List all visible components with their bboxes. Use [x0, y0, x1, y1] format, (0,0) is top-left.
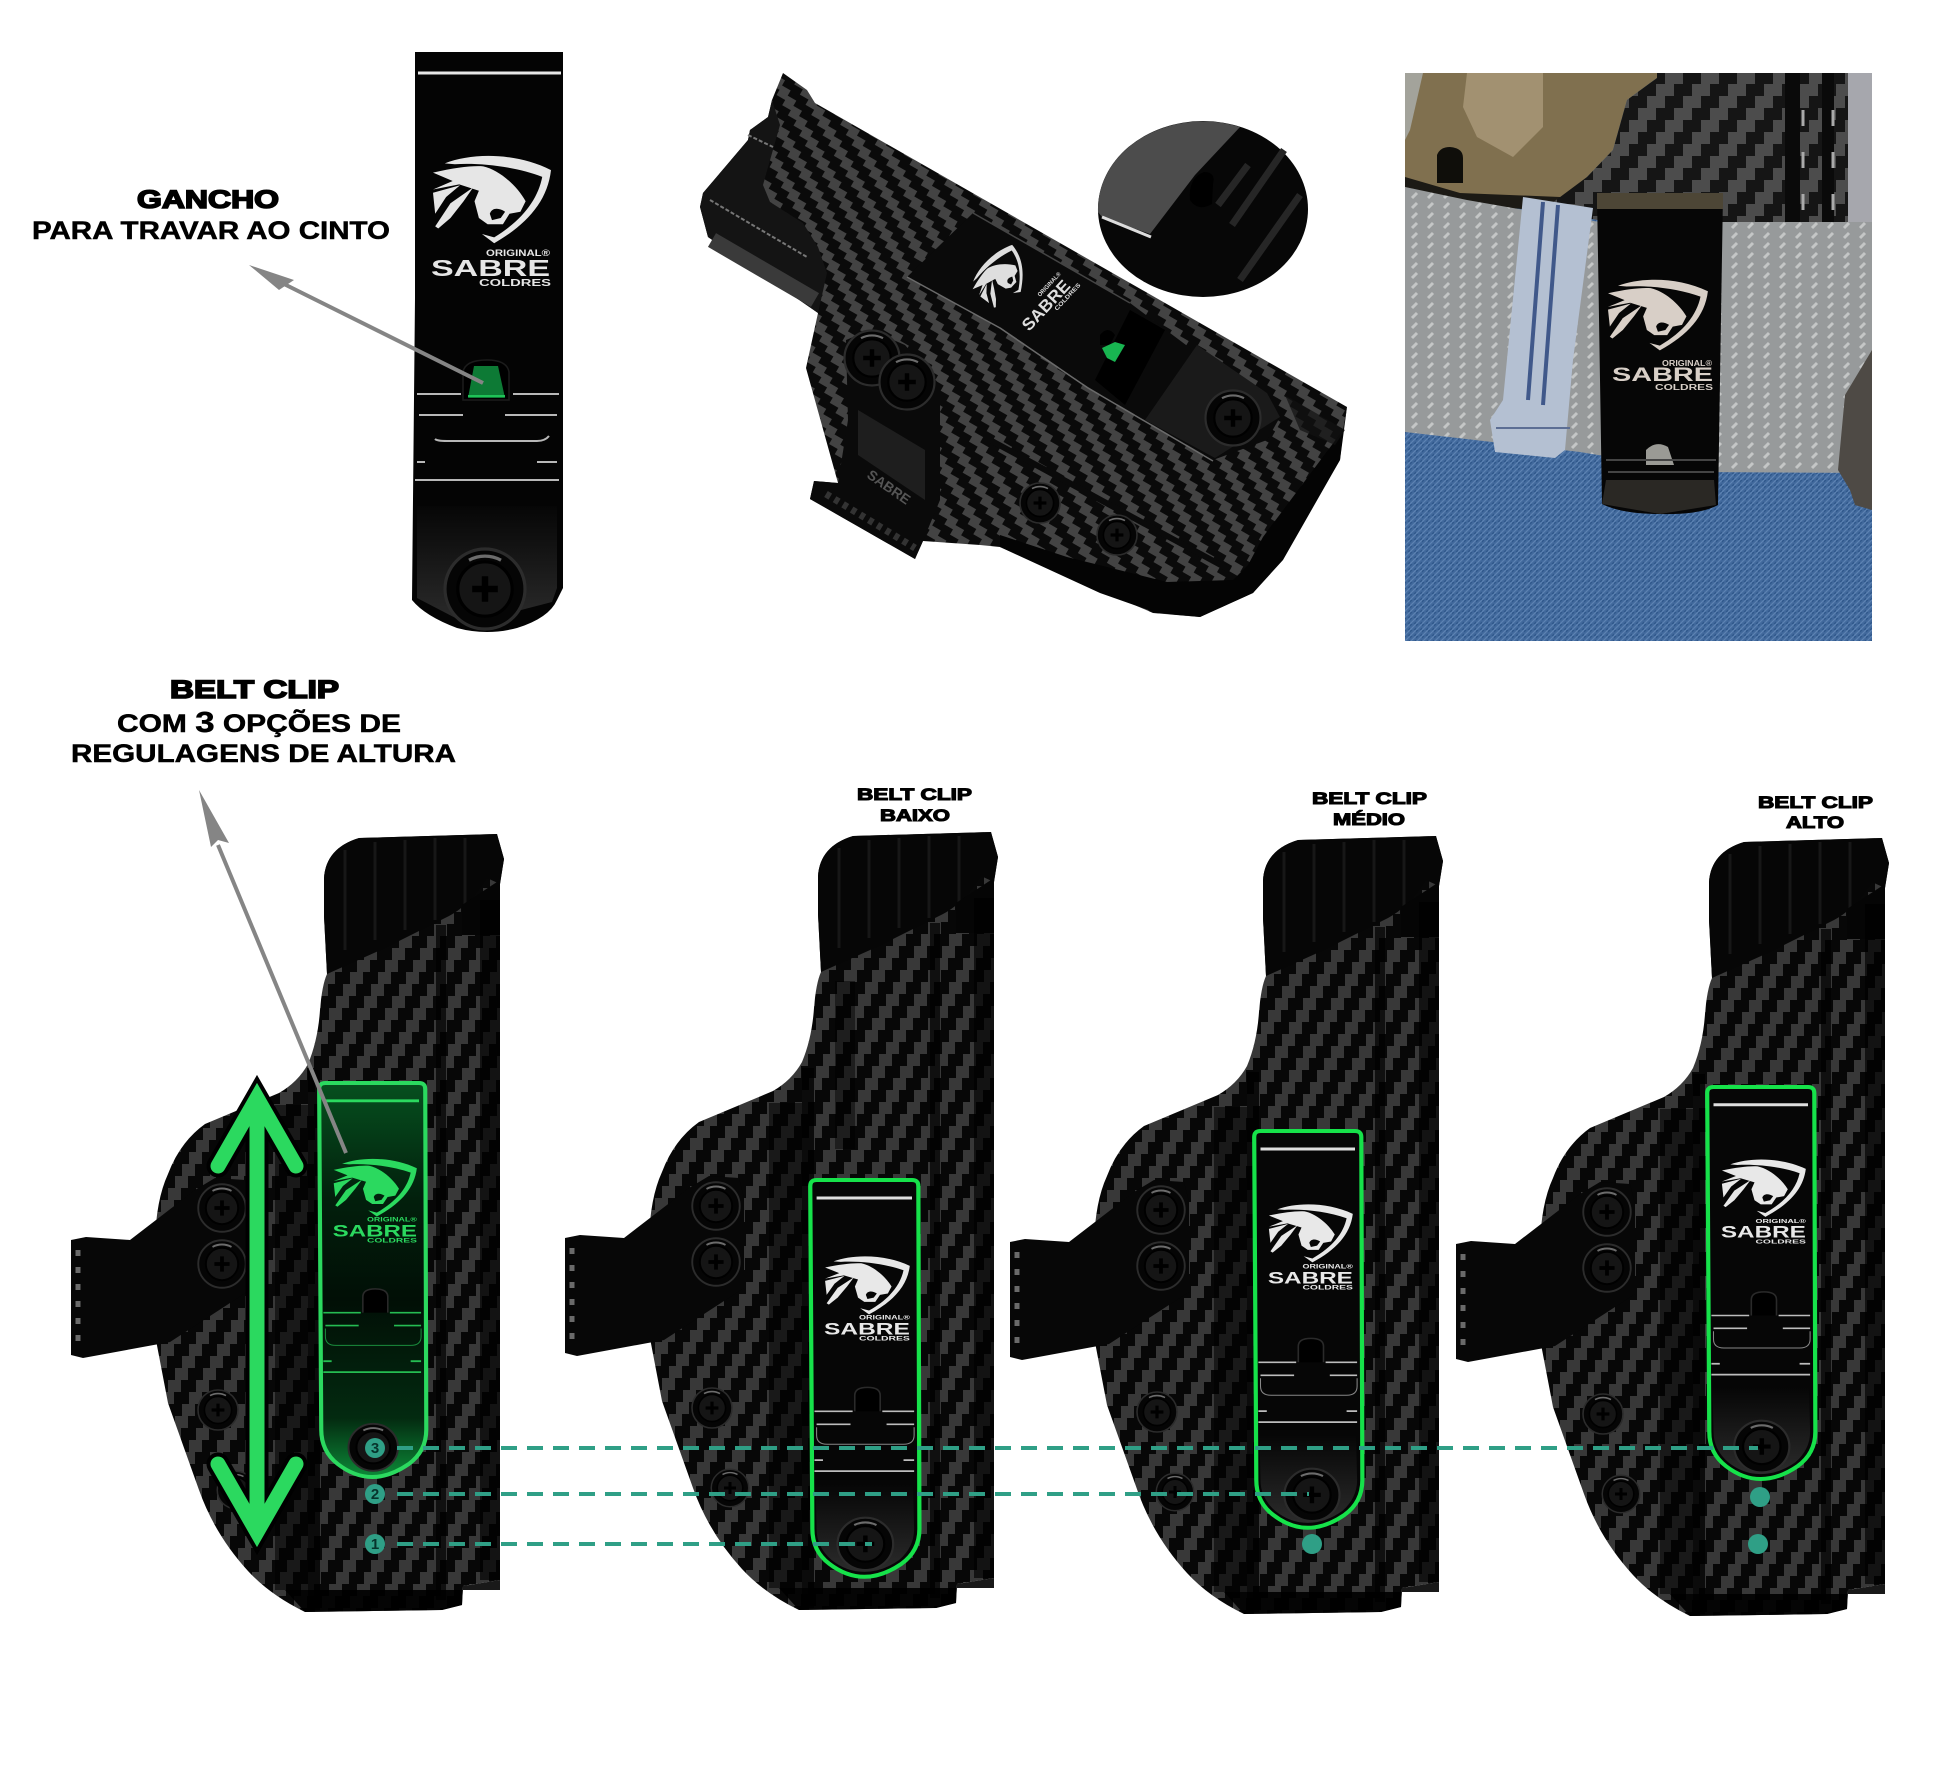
logo on close-up clip: SABRE [431, 255, 550, 281]
position markers 1 2 3: 2 [371, 1486, 379, 1503]
clip: alto: COLDRES [1756, 1239, 1806, 1246]
label: belt clip alto [1758, 793, 1873, 832]
belt clip in photo [1597, 193, 1723, 514]
slide rail [700, 100, 827, 313]
position markers 1 2 3 [365, 1438, 385, 1554]
gun frame [1405, 73, 1665, 212]
label: belt clip medio: BELT CLIP [1312, 789, 1427, 808]
clip: baixo: SABRE [824, 1319, 910, 1338]
double arrow: height adjustment [218, 1098, 296, 1532]
paddle piece right [1838, 350, 1872, 510]
clip: medio [1254, 1131, 1362, 1528]
clip: baixo: ORIGINAL® [859, 1315, 911, 1322]
fabric top right [1848, 73, 1872, 223]
clip: medio: SABRE [1268, 1268, 1353, 1287]
label: belt clip alto: BELT CLIP [1758, 793, 1873, 812]
screw [445, 549, 525, 629]
inset circle: hook detail [1098, 121, 1308, 297]
photo: clip worn on belt [1405, 73, 1872, 641]
clip: medio: COLDRES [1303, 1285, 1353, 1291]
highlighted clip: holster 1: COLDRES [367, 1238, 417, 1244]
mid holster clip [907, 213, 1280, 461]
holster 2 [565, 832, 998, 1610]
heading: belt clip regulagens [71, 676, 456, 768]
holster 3 [1010, 836, 1443, 1614]
clip: baixo: COLDRES [859, 1336, 910, 1342]
green hook [468, 366, 505, 398]
top belt clip close-up [412, 52, 563, 632]
label: belt clip baixo: BAIXO [880, 806, 950, 825]
carbon holster [1540, 73, 1848, 223]
label: belt clip baixo [857, 785, 972, 825]
clip: baixo [810, 1180, 919, 1577]
label: belt clip medio: MÉDIO [1333, 810, 1405, 829]
clip: alto: ORIGINAL® [1756, 1218, 1807, 1225]
heading: belt clip regulagens: BELT CLIP [170, 676, 339, 704]
mid holster paddle: SABRE [864, 466, 914, 508]
belt clip in photo: SABRE [1612, 365, 1713, 386]
mid holster clip: COLDRES [1054, 283, 1082, 312]
belt clip in photo: COLDRES [1655, 383, 1714, 392]
unused position dots [1302, 1487, 1770, 1554]
logo on close-up clip: ORIGINAL® [486, 248, 550, 258]
mid holster clip: SABRE [1018, 276, 1074, 335]
belt clip in photo: ORIGINAL® [1662, 359, 1712, 368]
hook notch and lines [415, 360, 559, 624]
mid holster paddle [810, 330, 940, 559]
clip: alto [1707, 1087, 1815, 1479]
logo on close-up clip: COLDRES [479, 278, 551, 289]
label: belt clip medio [1312, 789, 1427, 829]
heading: gancho [32, 186, 390, 245]
arrow: belt clip pointer [199, 790, 346, 1153]
logo on close-up clip [431, 156, 551, 289]
heading: belt clip regulagens: COM 3 OPÇÕES DE [117, 707, 401, 739]
heading: gancho: PARA TRAVAR AO CINTO [32, 217, 390, 245]
highlighted clip: holster 1 [319, 1083, 426, 1477]
mid holster clip: ORIGINAL® [1036, 271, 1063, 298]
heading: gancho: GANCHO [137, 186, 279, 214]
arrow: gancho pointer [249, 265, 483, 383]
clip: medio: ORIGINAL® [1303, 1264, 1354, 1271]
middle holster angled view [700, 73, 1347, 617]
holster 4 [1456, 838, 1889, 1616]
belt loop [1490, 197, 1593, 458]
label: belt clip baixo: BELT CLIP [857, 785, 972, 804]
position markers 1 2 3: 1 [371, 1536, 379, 1553]
highlighted clip: holster 1: ORIGINAL® [367, 1217, 418, 1224]
clip: alto: SABRE [1721, 1222, 1806, 1242]
lower rim [1000, 407, 1347, 617]
belt strap [1405, 187, 1872, 473]
heading: belt clip regulagens: REGULAGENS DE ALTURA [71, 740, 456, 768]
holster 1 [71, 834, 504, 1612]
dashed guide lines [397, 1448, 1758, 1544]
highlighted clip: holster 1: SABRE [333, 1221, 417, 1240]
label: belt clip alto: ALTO [1786, 813, 1844, 832]
position markers 1 2 3: 3 [371, 1440, 379, 1457]
